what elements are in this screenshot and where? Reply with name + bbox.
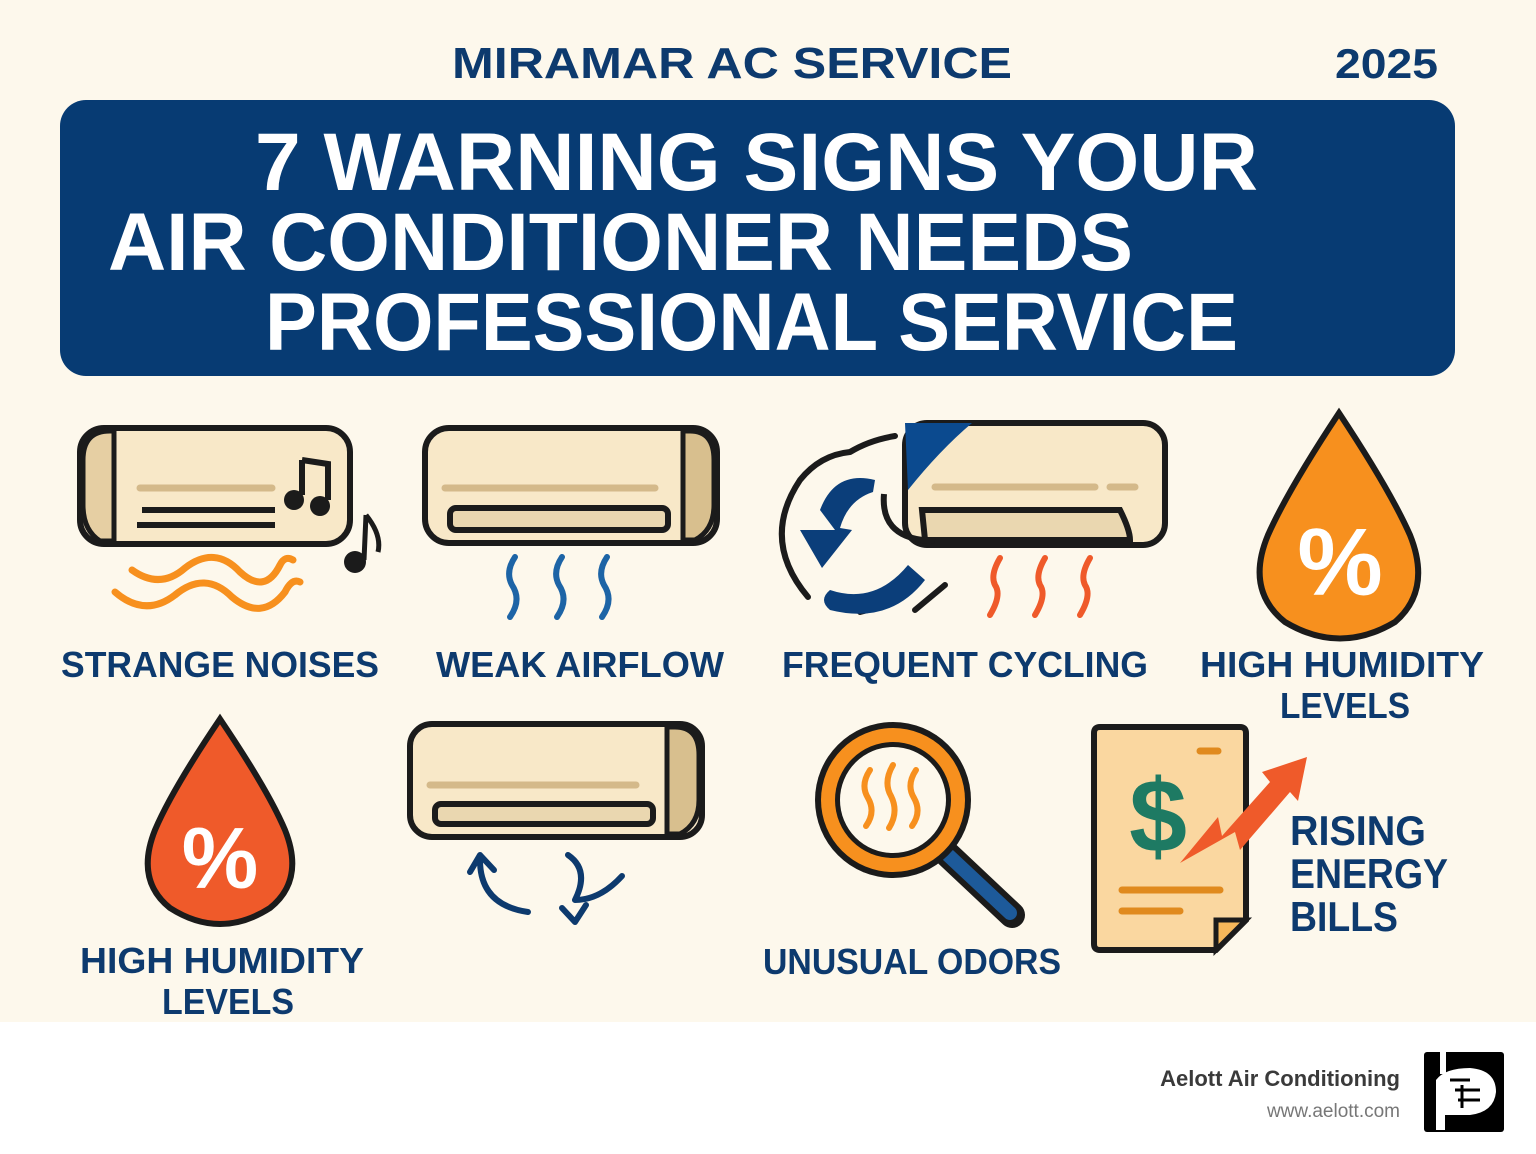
icon: energy bill bbox=[1094, 727, 1307, 950]
label: high humidity (bottom) bbox=[80, 940, 364, 1022]
label: unusual odors: UNUSUAL ODORS bbox=[763, 941, 1061, 982]
icon: weak airflow AC bbox=[425, 428, 717, 617]
icon: orange humidity drop: % bbox=[1297, 509, 1383, 616]
icon: red humidity drop bbox=[148, 719, 292, 924]
title banner: PROFESSIONAL SERVICE bbox=[265, 277, 1238, 368]
label: frequent cycling: FREQUENT CYCLING bbox=[782, 644, 1148, 685]
label: weak airflow: WEAK AIRFLOW bbox=[436, 644, 724, 685]
label: high humidity (top): LEVELS bbox=[1280, 685, 1410, 726]
label: rising energy bills: ENERGY bbox=[1290, 850, 1448, 897]
icon: magnifier with odors bbox=[815, 722, 1012, 915]
icon: AC with circulating arrows bbox=[410, 724, 702, 922]
footer: url: www.aelott.com bbox=[1266, 1101, 1400, 1122]
icon: red humidity drop: % bbox=[182, 811, 258, 907]
header: year: 2025 bbox=[1335, 40, 1438, 87]
icon: orange humidity drop bbox=[1260, 413, 1418, 638]
footer: company name: Aelott Air Conditioning bbox=[1160, 1066, 1400, 1091]
label: high humidity (bottom): HIGH HUMIDITY bbox=[80, 940, 364, 981]
icon: strange noises AC bbox=[80, 428, 379, 608]
label: rising energy bills: BILLS bbox=[1290, 893, 1398, 940]
footer: logo bbox=[1424, 1052, 1504, 1132]
label: high humidity (top): HIGH HUMIDITY bbox=[1200, 644, 1484, 685]
title banner: AIR CONDITIONER NEEDS bbox=[108, 197, 1133, 288]
icon: energy bill: $ bbox=[1129, 759, 1187, 875]
label: rising energy bills: RISING bbox=[1290, 807, 1426, 854]
label: rising energy bills bbox=[1290, 807, 1448, 940]
label: high humidity (bottom): LEVELS bbox=[162, 981, 294, 1022]
label: strange noises: STRANGE NOISES bbox=[61, 644, 379, 685]
title banner bbox=[60, 100, 1455, 376]
icon: frequent cycling bbox=[782, 423, 1165, 615]
label: high humidity (top) bbox=[1200, 644, 1484, 726]
title banner: 7 WARNING SIGNS YOUR bbox=[255, 117, 1258, 208]
header: brand: MIRAMAR AC SERVICE bbox=[452, 39, 1012, 88]
